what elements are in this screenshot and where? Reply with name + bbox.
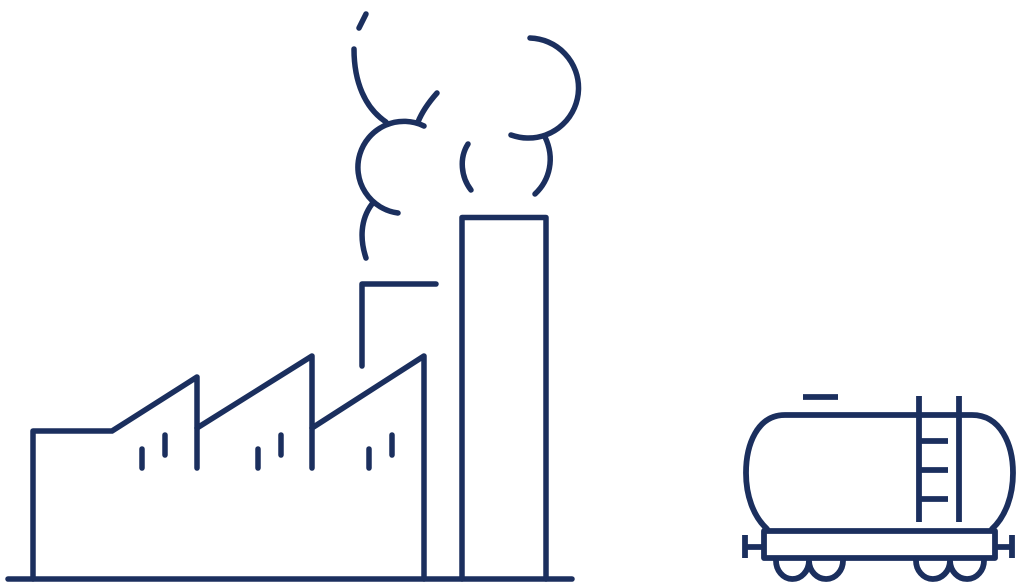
- wheels: [776, 560, 984, 579]
- ladder: [919, 396, 959, 522]
- icon: tank wagon: [745, 396, 1013, 579]
- icon: ground line: [8, 576, 572, 582]
- icon: left smoke plume: [354, 14, 437, 258]
- icon: tall chimney: [462, 218, 546, 579]
- wagon chassis: [764, 531, 995, 558]
- tank hatch: [803, 394, 838, 400]
- icon: factory building: [33, 356, 424, 579]
- tank body: [746, 415, 1013, 529]
- icon: small chimney: [362, 284, 436, 366]
- icon: right smoke plume: [462, 38, 579, 194]
- couplers: [745, 535, 1012, 558]
